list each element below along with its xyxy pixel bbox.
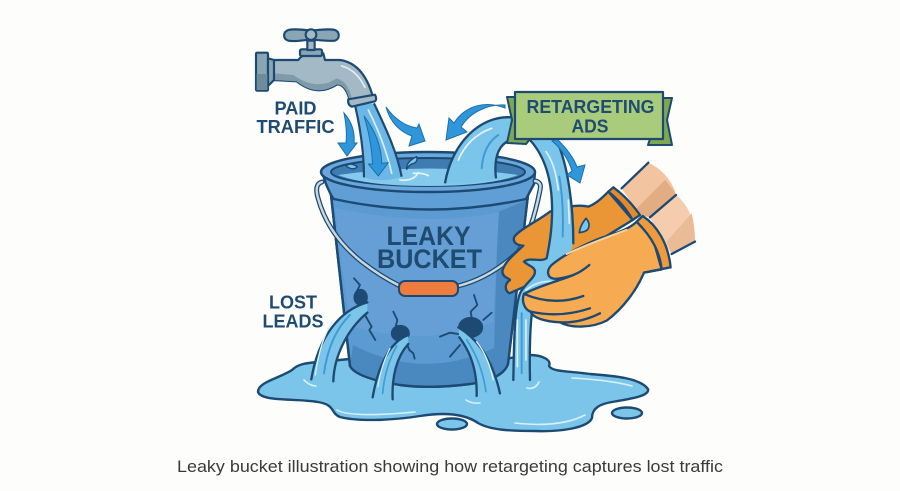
caption: Leaky bucket illustration showing how retargeting captures lost traffic bbox=[177, 457, 724, 476]
hole: right bbox=[459, 317, 483, 337]
arrow: retargeting right bbox=[552, 139, 585, 183]
handle grip bbox=[399, 281, 458, 296]
glove cuff: front bbox=[637, 216, 671, 273]
banner text bbox=[526, 97, 654, 136]
arm: front bbox=[650, 195, 695, 254]
label: leaky bucket: LEAKY bbox=[386, 221, 470, 251]
label: leaky bucket bbox=[377, 221, 482, 274]
lost leads label: LEADS bbox=[262, 312, 324, 332]
banner ribbon left bbox=[507, 97, 530, 144]
stream: over the banner, over hands and down to the puddle bbox=[513, 140, 573, 380]
retargeting banner bbox=[507, 92, 672, 145]
banner ribbon right bbox=[648, 98, 672, 145]
arm: back bbox=[622, 163, 676, 217]
arrow: paid traffic left bbox=[338, 113, 357, 156]
faucet body bbox=[273, 53, 373, 99]
water inside bucket bbox=[338, 168, 518, 186]
banner text: RETARGETING bbox=[526, 97, 654, 117]
leak stream: right bbox=[458, 327, 500, 396]
bucket bbox=[321, 152, 535, 387]
retargeting arc of water bbox=[445, 117, 515, 184]
glove finger lines bbox=[524, 265, 600, 322]
splashes bbox=[407, 157, 417, 169]
leak stream: middle bbox=[373, 335, 408, 399]
glove cuff: back bbox=[608, 187, 640, 220]
paid traffic label: TRAFFIC bbox=[256, 117, 334, 137]
banner panel bbox=[515, 92, 663, 139]
leak stream: left bbox=[311, 302, 367, 381]
lost leads label: LOST bbox=[269, 292, 317, 312]
bucket handle bbox=[317, 181, 540, 296]
leaks and cracks bbox=[311, 278, 500, 399]
label: leaky bucket: BUCKET bbox=[377, 244, 482, 274]
glove: front bbox=[523, 222, 662, 327]
water puddle bbox=[258, 355, 648, 431]
lost leads label bbox=[262, 292, 324, 332]
faucet water stream bbox=[346, 103, 428, 180]
water drop on glove bbox=[579, 218, 589, 233]
faucet flange bbox=[256, 53, 268, 91]
faucet valve stem bbox=[300, 49, 322, 56]
banner text: ADS bbox=[572, 116, 608, 136]
arrow: paid traffic right bbox=[386, 107, 425, 146]
hole: middle bbox=[391, 325, 409, 341]
arrow: retargeting left bbox=[446, 104, 505, 140]
paid traffic label bbox=[256, 98, 334, 137]
hole: left bbox=[354, 289, 367, 305]
glove: back bbox=[502, 192, 633, 293]
cracks bbox=[354, 278, 492, 359]
hands and retargeting water bbox=[502, 140, 695, 380]
bucket body bbox=[331, 195, 528, 387]
faucet nozzle bbox=[348, 95, 376, 107]
paid traffic label: PAID bbox=[274, 98, 316, 118]
faucet bbox=[256, 29, 376, 107]
faucet handle bbox=[284, 29, 339, 41]
arrow: stream down bbox=[364, 116, 388, 176]
bucket rim bbox=[322, 172, 535, 210]
